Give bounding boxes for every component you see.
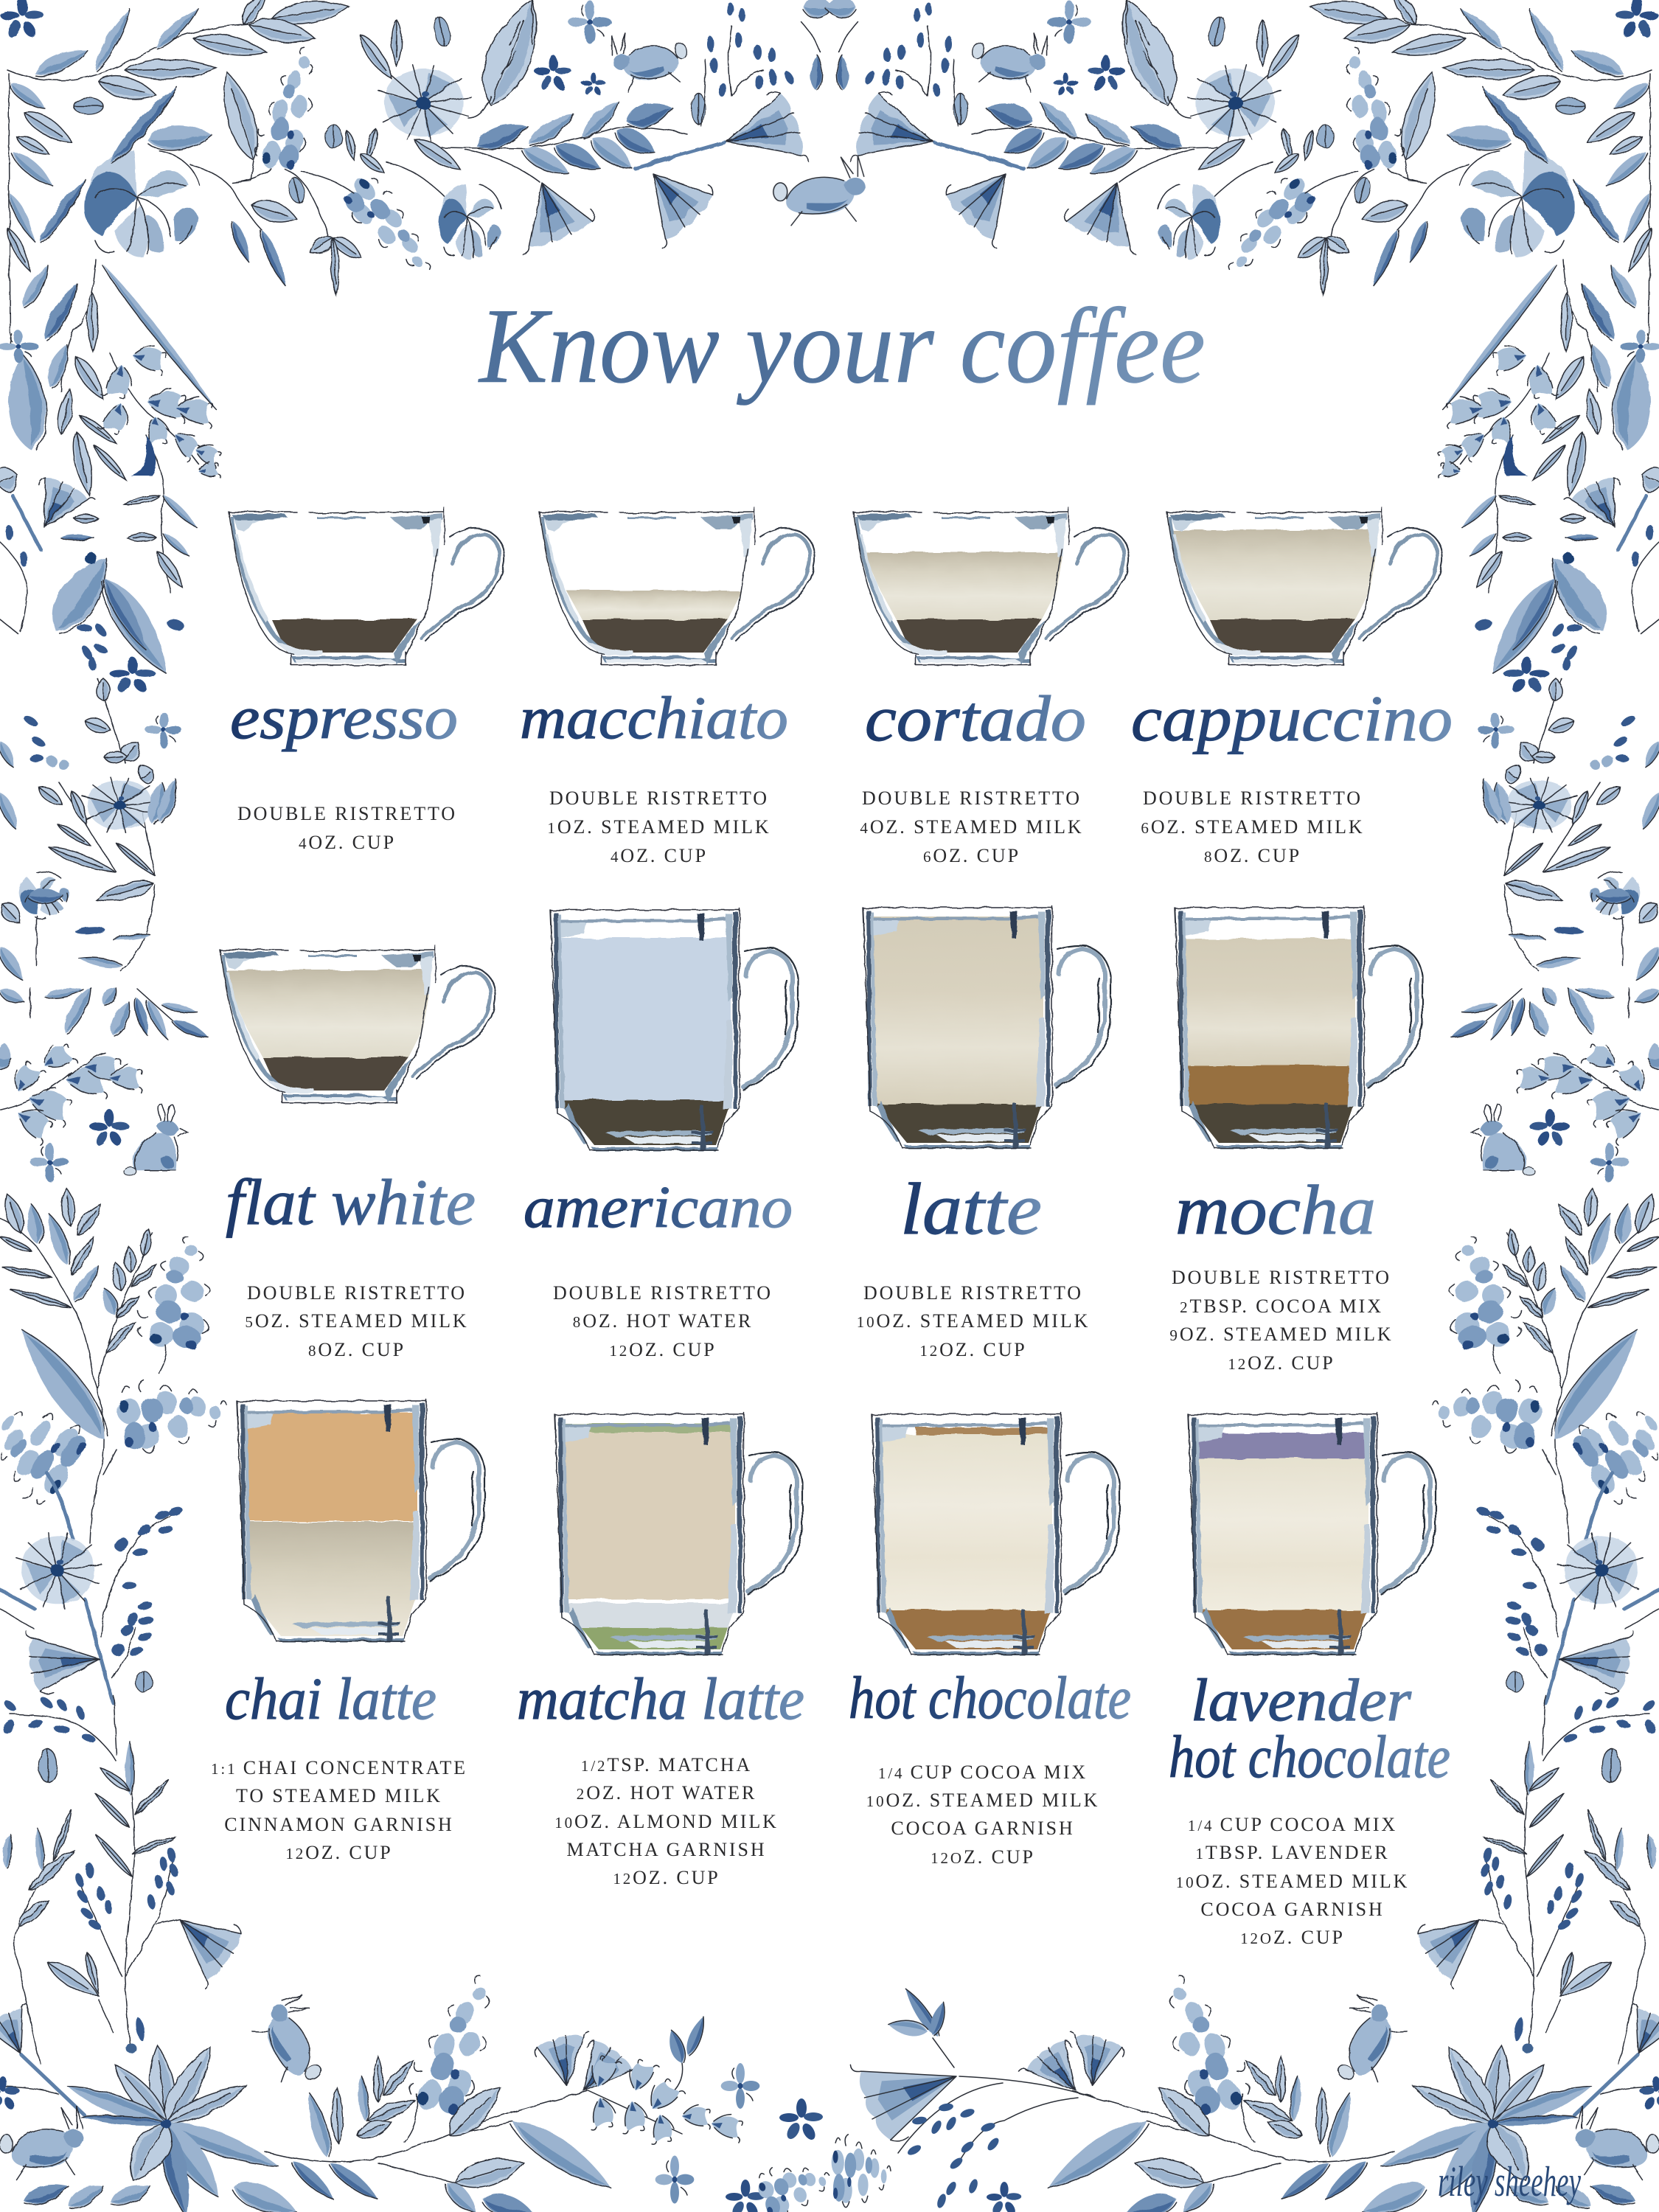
recipe: mocha: 2: [1180, 1298, 1190, 1316]
recipe: latte: OZ. STEAMED MILK: [877, 1310, 1090, 1332]
mug: latte: [863, 906, 1110, 1149]
layers: cappuccino: [1159, 530, 1395, 664]
mug: matcha latte: [554, 1413, 802, 1655]
recipe: cappuccino: 6: [1141, 819, 1151, 837]
upper left column of leaves: [0, 74, 220, 497]
heading: espresso: espresso: [230, 684, 458, 752]
bottom leaves and main stem: [21, 2031, 640, 2212]
recipe: matcha latte: 10: [554, 1814, 574, 1832]
recipe: cortado: 4: [860, 819, 870, 837]
recipe: latte: DOUBLE RISTRETTO: [863, 1282, 1083, 1304]
recipe: cappuccino: DOUBLE RISTRETTO: [1143, 787, 1363, 809]
heading: matcha latte: matcha latte: [517, 1667, 804, 1732]
recipe: mocha: TBSP. COCOA MIX: [1190, 1295, 1383, 1317]
recipe: cortado: OZ. STEAMED MILK: [870, 816, 1084, 838]
fern column and seed stems: [1, 1742, 249, 2063]
top peony and lilac: [85, 41, 465, 295]
cup: espresso: [221, 507, 504, 665]
recipe: hot chocolate: COCOA GARNISH: [891, 1818, 1075, 1839]
recipe: cappuccino: 8: [1204, 848, 1214, 866]
heading: americano: americano: [524, 1175, 793, 1240]
recipe: hot chocolate: CUP COCOA MIX: [911, 1761, 1088, 1783]
recipe: lavender hot chocolate: 1/4: [1188, 1817, 1220, 1834]
bottom rabbit and lilac: [243, 1965, 511, 2123]
artist signature: riley sheehey: [1438, 2157, 1581, 2205]
recipe: chai latte: 12: [285, 1845, 305, 1863]
recipe: mocha: 12: [1228, 1355, 1248, 1373]
heading: mocha: mocha: [1175, 1171, 1376, 1249]
mug: americano: [550, 908, 798, 1152]
floral border: left half, mirrored for the right: [0, 0, 833, 2212]
recipe: latte: 12: [919, 1342, 939, 1360]
layers: matcha latte: [554, 1423, 746, 1655]
recipe: espresso: OZ. CUP: [308, 832, 396, 853]
glass: americano mug: [550, 908, 798, 1151]
recipe: latte: 10: [857, 1313, 877, 1331]
heading: cortado: cortado: [865, 684, 1086, 755]
top daisy, feather leaf, rabbit: [355, 0, 833, 142]
heading: lavender hot chocolate: hot chocolate: [1169, 1723, 1450, 1790]
side spray, florets and rabbit: [0, 1040, 187, 1181]
mug: hot chocolate: [872, 1413, 1119, 1655]
recipe: lavender hot chocolate: 10: [1176, 1874, 1196, 1891]
recipe: flat white: 8: [308, 1342, 318, 1360]
recipe: chai latte: CHAI CONCENTRATE: [243, 1757, 467, 1778]
recipe: matcha latte: 1/2: [581, 1757, 607, 1775]
small floret spray: [98, 342, 223, 481]
recipe: mocha: DOUBLE RISTRETTO: [1172, 1267, 1391, 1288]
layers: chai latte: [237, 1413, 428, 1644]
recipe: cortado: DOUBLE RISTRETTO: [862, 787, 1082, 809]
recipe: americano: 12: [609, 1342, 629, 1360]
cup: macchiato: [532, 507, 815, 665]
heading: flat white: flat white: [226, 1167, 476, 1239]
cup: cappuccino: [1159, 507, 1442, 665]
heading: cappuccino: cappuccino: [1131, 684, 1453, 755]
top centre rabbit: [773, 156, 866, 226]
recipe: flat white: 5: [245, 1313, 255, 1331]
recipe: lavender hot chocolate: 1: [1195, 1845, 1206, 1863]
recipe: matcha latte: 12: [613, 1870, 633, 1888]
recipe: macchiato: OZ. CUP: [620, 845, 708, 866]
layer: espresso shot: [272, 618, 417, 653]
glass: chai latte mug: [237, 1399, 484, 1642]
heading: lavender hot chocolate: lavender: [1191, 1666, 1412, 1733]
recipe: chai latte: CINNAMON GARNISH: [224, 1814, 454, 1835]
recipe: lavender hot chocolate: CUP COCOA MIX: [1220, 1814, 1397, 1835]
recipe: cappuccino: OZ. CUP: [1214, 845, 1301, 866]
top main branch with bells: [439, 59, 809, 260]
bottom centre left sprigs: [585, 2014, 837, 2212]
layers: mocha: [1175, 939, 1366, 1148]
recipe: macchiato: 4: [611, 848, 620, 866]
mug: lavender hot chocolate: [1188, 1413, 1436, 1655]
glass: espresso cup: [229, 507, 504, 665]
recipe: chai latte: OZ. CUP: [305, 1842, 393, 1863]
mug: mocha: [1175, 906, 1422, 1149]
recipe: hot chocolate: 12O: [931, 1849, 964, 1867]
left botanical branch: [0, 1187, 159, 1543]
mug: chai latte: [237, 1399, 484, 1644]
title: Know your coffee: [478, 286, 1206, 406]
recipe: macchiato: DOUBLE RISTRETTO: [549, 787, 769, 809]
recipe: chai latte: TO STEAMED MILK: [236, 1785, 442, 1806]
corner flower, bell and rabbit: [0, 2004, 284, 2212]
recipe: mocha: OZ. CUP: [1248, 1352, 1335, 1374]
recipe: mocha: OZ. STEAMED MILK: [1180, 1324, 1394, 1345]
heading: chai latte: chai latte: [225, 1667, 437, 1732]
cup: cortado: [846, 507, 1129, 665]
recipe: lavender hot chocolate: COCOA GARNISH: [1200, 1899, 1385, 1920]
recipe: cortado: OZ. CUP: [933, 845, 1020, 866]
recipe: espresso: 4: [299, 835, 308, 852]
recipe: latte: OZ. CUP: [939, 1339, 1027, 1360]
layers: lavender hot chocolate: [1188, 1433, 1380, 1654]
layers: flat white: [212, 970, 448, 1102]
layers: hot chocolate: [872, 1427, 1063, 1654]
recipe: americano: 8: [573, 1313, 582, 1331]
recipe: matcha latte: OZ. CUP: [633, 1867, 720, 1888]
recipe: flat white: OZ. STEAMED MILK: [255, 1310, 469, 1332]
glass: macchiato cup: [539, 507, 815, 665]
recipe: lavender hot chocolate: 12O: [1240, 1930, 1273, 1947]
recipe: lavender hot chocolate: Z. CUP: [1273, 1927, 1345, 1948]
floral border: right half mirror: [826, 0, 1659, 2212]
recipe: macchiato: 1: [547, 819, 557, 837]
recipe: espresso: DOUBLE RISTRETTO: [237, 803, 457, 824]
heading: macchiato: macchiato: [520, 684, 788, 751]
lower left flowers and seed sprays: [0, 1472, 184, 1782]
glass: latte mug: [863, 906, 1110, 1149]
left lilac clusters: [0, 1230, 232, 1513]
heading: hot chocolate: hot chocolate: [849, 1664, 1131, 1731]
recipe: hot chocolate: OZ. STEAMED MILK: [886, 1790, 1099, 1811]
recipe: macchiato: OZ. STEAMED MILK: [557, 816, 771, 838]
glass: hot chocolate mug: [872, 1413, 1119, 1655]
glass: flat white cup: [220, 945, 495, 1103]
recipe: americano: OZ. CUP: [629, 1339, 717, 1360]
layers: americano: [550, 938, 742, 1152]
layers: cortado: [846, 552, 1082, 664]
recipe: hot chocolate: 1/4: [878, 1764, 911, 1782]
glass: cortado cup: [853, 507, 1129, 665]
cup: flat white: [212, 945, 495, 1103]
recipe: matcha latte: 2: [577, 1785, 586, 1803]
recipe: chai latte: 1:1: [211, 1760, 243, 1778]
recipe: flat white: DOUBLE RISTRETTO: [247, 1282, 467, 1304]
recipe: americano: DOUBLE RISTRETTO: [553, 1282, 773, 1304]
mid left sprig and flower: [0, 678, 182, 984]
recipe: matcha latte: OZ. ALMOND MILK: [574, 1811, 779, 1832]
glass: matcha latte mug: [554, 1413, 802, 1655]
heading: latte: latte: [900, 1168, 1042, 1250]
recipe: matcha latte: OZ. HOT WATER: [586, 1782, 757, 1804]
glass: cappuccino cup: [1166, 507, 1442, 665]
layers: macchiato: [566, 590, 742, 653]
glass: lavender hot chocolate mug: [1188, 1413, 1436, 1655]
recipe: hot chocolate: 10: [866, 1792, 886, 1810]
lower leaves above rabbit: [0, 984, 211, 1043]
recipe: matcha latte: MATCHA GARNISH: [566, 1839, 767, 1860]
recipe: matcha latte: TSP. MATCHA: [607, 1754, 752, 1775]
recipe: americano: OZ. HOT WATER: [582, 1310, 753, 1332]
recipe: cortado: 6: [923, 848, 933, 866]
fern, feather leaf and dark leaf: [0, 434, 199, 695]
recipe: flat white: OZ. CUP: [318, 1339, 406, 1360]
layers: latte: [863, 915, 1054, 1148]
recipe: hot chocolate: Z. CUP: [964, 1846, 1035, 1868]
glass: mocha mug: [1175, 906, 1422, 1149]
top left branch with leaves: [0, 0, 350, 114]
recipe: mocha: 9: [1169, 1326, 1180, 1344]
bottom centre right sprigs: [832, 1986, 1094, 2212]
recipe: lavender hot chocolate: TBSP. LAVENDER: [1206, 1842, 1390, 1863]
recipe: cappuccino: OZ. STEAMED MILK: [1151, 816, 1365, 838]
recipe: lavender hot chocolate: OZ. STEAMED MILK: [1196, 1871, 1409, 1892]
